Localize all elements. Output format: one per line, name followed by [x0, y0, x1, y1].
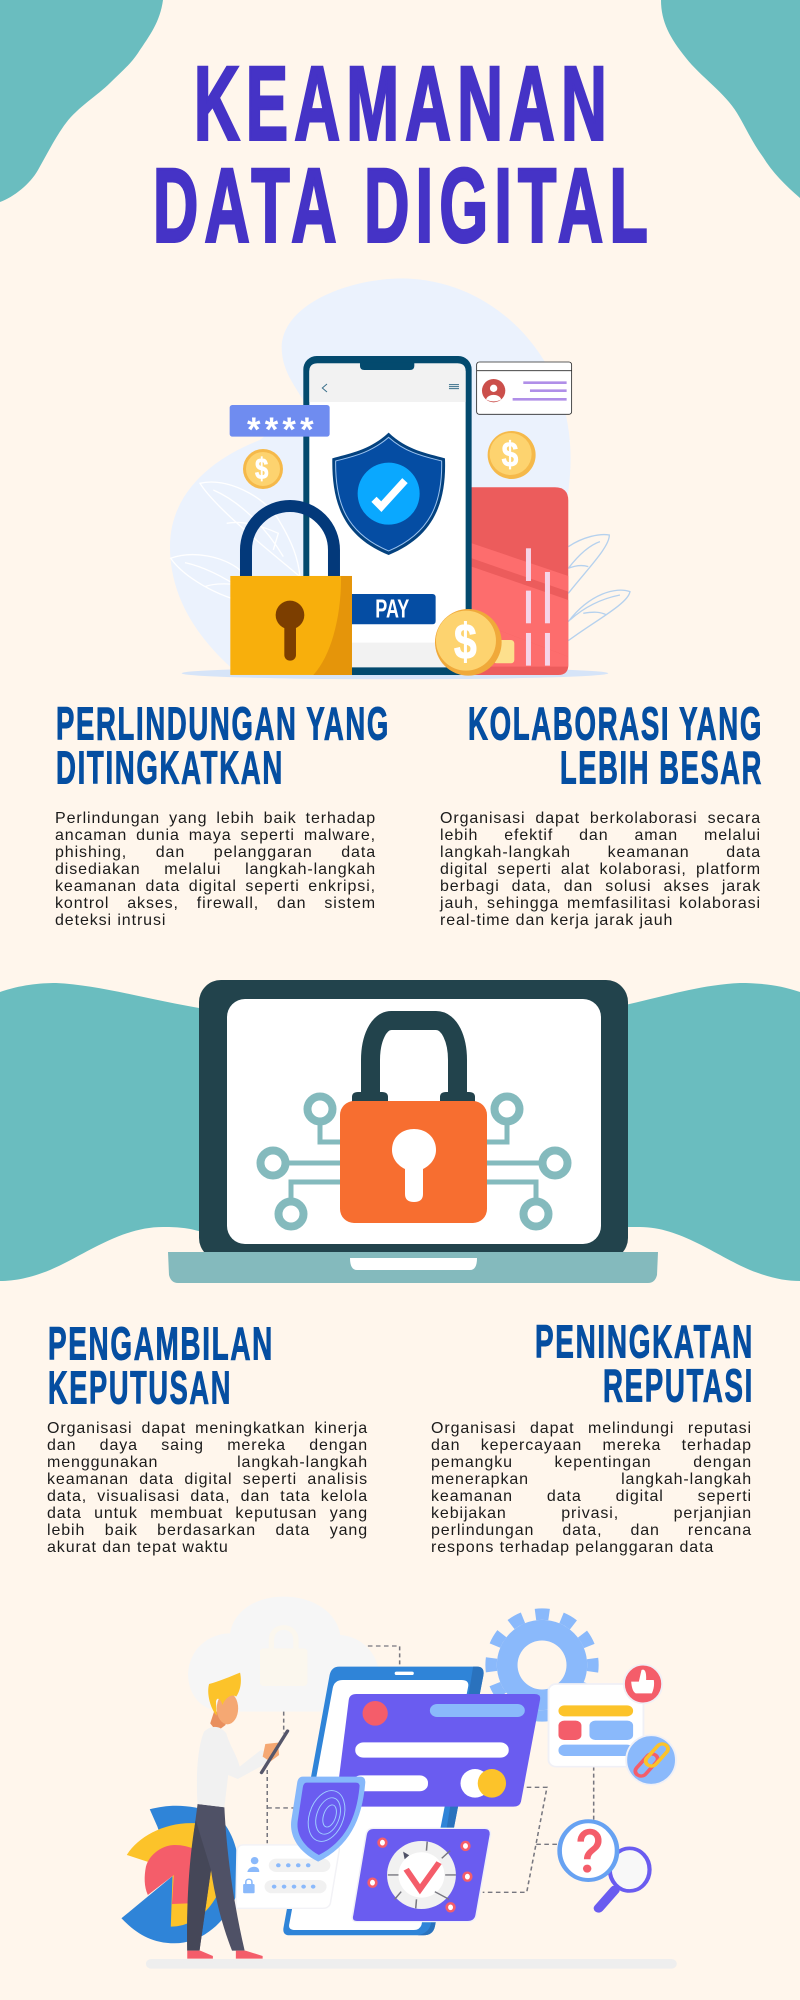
shirt — [197, 1727, 268, 1807]
body text: peningkatan reputasi: menerapkan langkah-langkah — [431, 1471, 752, 1488]
tablet — [261, 1731, 288, 1773]
password box: **** — [247, 411, 314, 449]
content panel — [549, 1684, 643, 1767]
body text: kolaborasi: Organisasi dapat berkolaborasi secara — [440, 810, 761, 827]
illustration: phone security — [170, 278, 630, 679]
body text: peningkatan reputasi: perlindungan data, dan rencana — [431, 1522, 752, 1539]
PAY button — [347, 594, 436, 624]
lock feet — [352, 1092, 475, 1102]
dashed connectors — [267, 1646, 594, 1905]
gear — [491, 1614, 593, 1716]
body text: pengambilan keputusan: data untuk membuat keputusan yang — [47, 1505, 368, 1522]
body text: kolaborasi: jauh, sehingga memfasilitasi kolaborasi — [440, 895, 761, 912]
password box — [230, 405, 330, 449]
coin large: $ — [454, 614, 477, 670]
heading: pengambilan: KEPUTUSAN — [48, 1362, 232, 1414]
lock shackle — [370, 1020, 458, 1096]
body text: perlindungan: disediakan melalui langkah-langkah — [55, 861, 376, 878]
body text: peningkatan reputasi: keamanan data digital seperti — [431, 1488, 752, 1505]
heading: peningkatan — [535, 1316, 754, 1412]
profile card — [477, 362, 572, 414]
login card — [236, 1845, 339, 1908]
teal wave band right — [625, 983, 800, 1281]
coin large — [435, 609, 502, 676]
question magnifier — [560, 1821, 617, 1880]
illustration: person and digital security — [121, 1597, 677, 1969]
coin right: $ — [502, 436, 519, 475]
body text: kolaborasi: lebih efektif dan aman melalui — [440, 827, 761, 844]
keyhole — [392, 1129, 436, 1202]
body text: pengambilan keputusan: data, visualisasi data, dan tata kelola — [47, 1488, 368, 1505]
fingerprint shield — [291, 1777, 365, 1862]
body text: pengambilan keputusan: dan daya saing mereka dengan — [47, 1437, 368, 1454]
body text: peningkatan reputasi: Organisasi dapat melindungi reputasi — [431, 1420, 752, 1437]
ground bar — [146, 1959, 677, 1969]
coin small left: $ — [255, 453, 268, 486]
heading: perlindungan: PERLINDUNGAN YANG — [56, 698, 390, 750]
body text: kolaborasi — [440, 810, 761, 929]
coin small left — [243, 449, 283, 489]
heading: pengambilan: PENGAMBILAN — [48, 1318, 274, 1370]
heading: perlindungan — [56, 698, 390, 794]
heading: perlindungan: DITINGKATKAN — [56, 742, 284, 794]
body text: kolaborasi: real-time dan kerja jarak jauh — [440, 912, 673, 929]
teal wave band left — [0, 983, 205, 1281]
body text: peningkatan reputasi: pemangku kepentingan dengan — [431, 1454, 752, 1471]
body text: perlindungan: Perlindungan yang lebih baik terhadap — [55, 810, 376, 827]
hair — [208, 1673, 241, 1716]
heading: pengambilan — [48, 1318, 274, 1414]
laptop body — [199, 980, 628, 1260]
top left teal blob — [0, 0, 163, 202]
laptop notch — [350, 1258, 477, 1270]
clock card — [352, 1828, 490, 1922]
smartphone — [303, 356, 472, 675]
body text: peningkatan reputasi — [431, 1420, 752, 1556]
laptop with lock — [168, 980, 658, 1283]
face — [217, 1692, 238, 1724]
coin right — [488, 431, 536, 479]
body text: perlindungan: deteksi intrusi — [55, 912, 166, 929]
body text: perlindungan: keamanan data digital seperti enkripsi, — [55, 878, 376, 895]
body text: peningkatan reputasi: respons terhadap pelanggaran data — [431, 1539, 714, 1556]
circuit lines and nodes — [260, 1096, 568, 1226]
body text: pengambilan keputusan: keamanan data digital seperti analisis — [47, 1471, 368, 1488]
blue leaves — [568, 535, 630, 641]
body text: perlindungan — [55, 810, 376, 929]
laptop screen — [227, 999, 601, 1244]
phone — [283, 1667, 484, 1935]
heading: kolaborasi — [468, 698, 763, 794]
body text: perlindungan: kontrol akses, firewall, dan sistem — [55, 895, 376, 912]
body text: perlindungan: ancaman dunia maya seperti malware, — [55, 827, 376, 844]
magnifier purple — [599, 1848, 650, 1908]
body text: pengambilan keputusan: menggunakan langkah-langkah — [47, 1454, 368, 1471]
hand — [263, 1743, 279, 1762]
cloud with lock — [188, 1597, 379, 1712]
top right teal blob — [661, 0, 800, 198]
laptop base — [168, 1252, 658, 1283]
body text: pengambilan keputusan — [47, 1420, 368, 1556]
body text: kolaborasi: langkah-langkah keamanan data — [440, 844, 761, 861]
thumbs up badge — [624, 1665, 662, 1703]
link badge — [626, 1735, 676, 1785]
body text: peningkatan reputasi: dan kepercayaan mereka terhadap — [431, 1437, 752, 1454]
padlock — [230, 506, 352, 675]
purple form card — [335, 1694, 540, 1807]
body text: peningkatan reputasi: kebijakan privasi, perjanjian — [431, 1505, 752, 1522]
body text: kolaborasi: digital seperti alat kolaborasi, platform — [440, 861, 761, 878]
body text: pengambilan keputusan: lebih baik berdasarkan data yang — [47, 1522, 368, 1539]
lock body — [340, 1101, 487, 1223]
neck — [210, 1712, 226, 1732]
body text: pengambilan keputusan: akurat dan tepat waktu — [47, 1539, 229, 1556]
body text: perlindungan: phishing, dan pelanggaran data — [55, 844, 376, 861]
ground shadow — [182, 667, 608, 679]
abstract pie — [121, 1806, 239, 1943]
person with tablet — [187, 1673, 288, 1959]
credit card — [463, 487, 568, 675]
shoes — [187, 1951, 263, 1959]
shield with check — [332, 433, 445, 555]
body text: pengambilan keputusan: Organisasi dapat meningkatkan kinerja — [47, 1420, 368, 1437]
background blob — [170, 278, 571, 667]
PAY button: PAY — [375, 594, 409, 624]
title — [153, 46, 654, 264]
body text: kolaborasi: berbagi data, dan solusi akses jarak — [440, 878, 761, 895]
trousers — [187, 1804, 245, 1951]
white leaves — [171, 482, 300, 603]
